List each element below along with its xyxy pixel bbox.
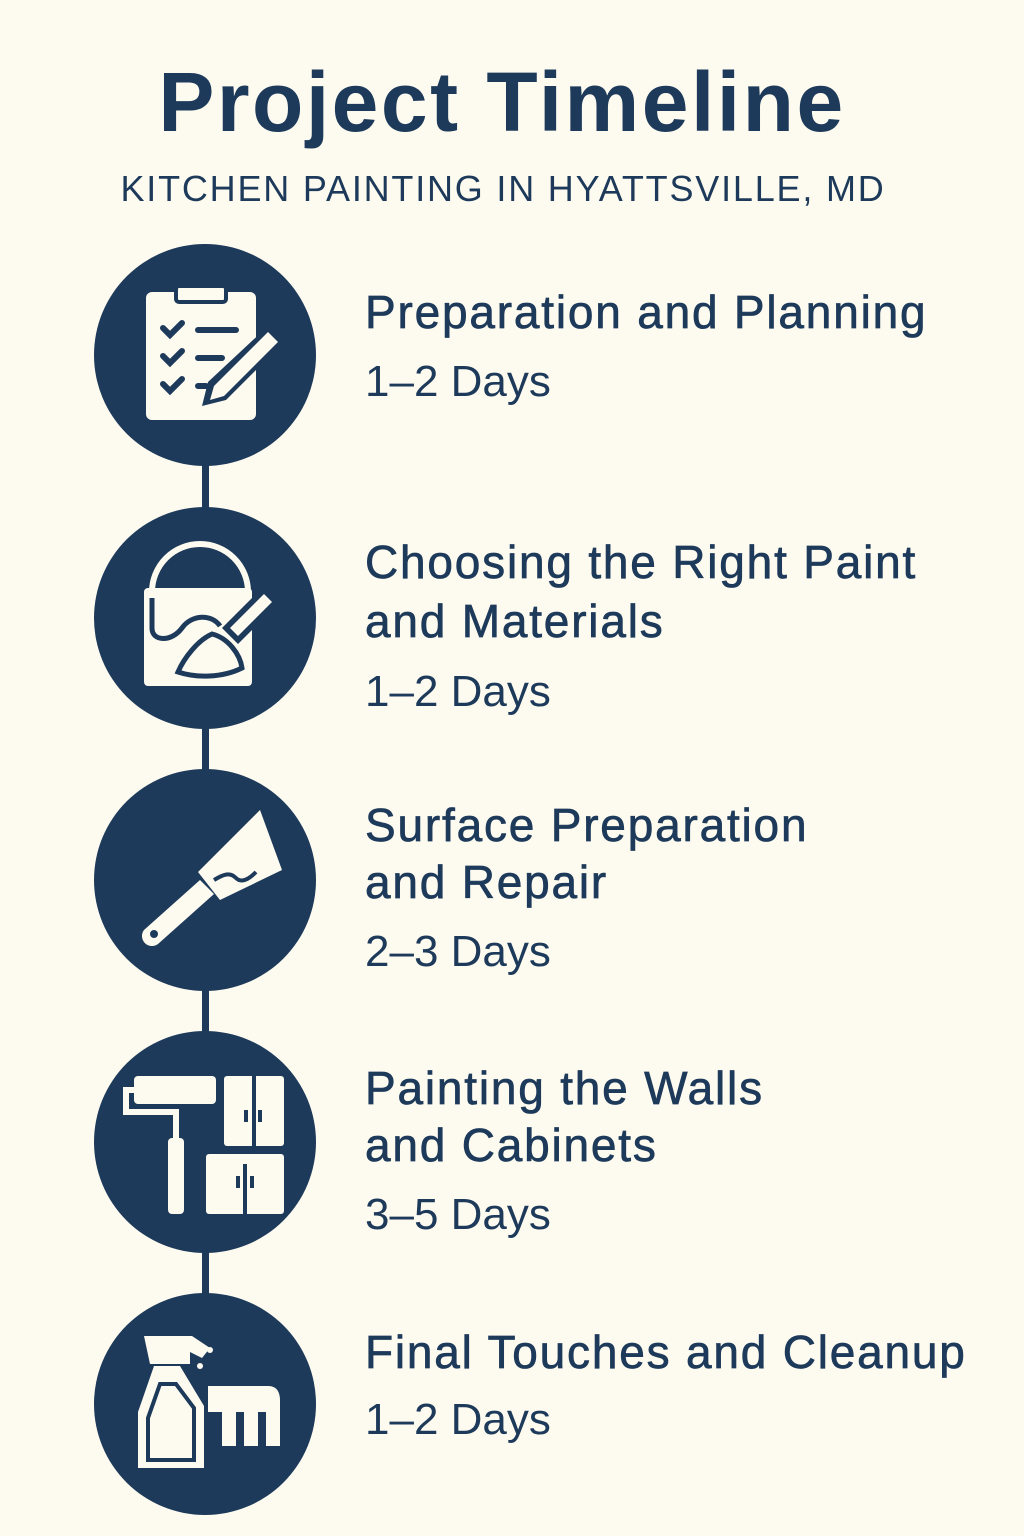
step 1 text: Preparation and Planning (365, 286, 927, 338)
step 3 text: and Repair (365, 856, 608, 908)
step 5 text: Final Touches and Cleanup (365, 1326, 967, 1378)
icon: spray bottle and cloth (94, 1293, 316, 1515)
step 2 text: Choosing the Right Paint (365, 536, 917, 588)
icon: putty knife (94, 769, 316, 991)
icon: paint bucket and brush (94, 507, 316, 729)
icon: clipboard checklist (94, 244, 316, 466)
step 4 text: and Cabinets (365, 1119, 658, 1171)
step 1 text: 1–2 Days (365, 357, 551, 406)
step 2 text (365, 536, 917, 716)
subtitle: KITCHEN PAINTING IN HYATTSVILLE, MD (120, 168, 886, 209)
step 5 text (365, 1326, 967, 1444)
step 1 text (365, 286, 927, 406)
step 4 text: 3–5 Days (365, 1190, 551, 1239)
step 3 text: 2–3 Days (365, 927, 551, 976)
step 5 text: 1–2 Days (365, 1395, 551, 1444)
step 2 text: and Materials (365, 595, 665, 647)
title: Project Timeline (158, 55, 846, 149)
connector line (202, 440, 209, 1340)
icon: roller and cabinets (94, 1031, 316, 1253)
step 3 text: Surface Preparation (365, 799, 808, 851)
step 4 text: Painting the Walls (365, 1062, 764, 1114)
step 4 text (365, 1062, 764, 1239)
step 2 text: 1–2 Days (365, 667, 551, 716)
timeline icons (94, 244, 316, 1515)
step 3 text (365, 799, 808, 976)
